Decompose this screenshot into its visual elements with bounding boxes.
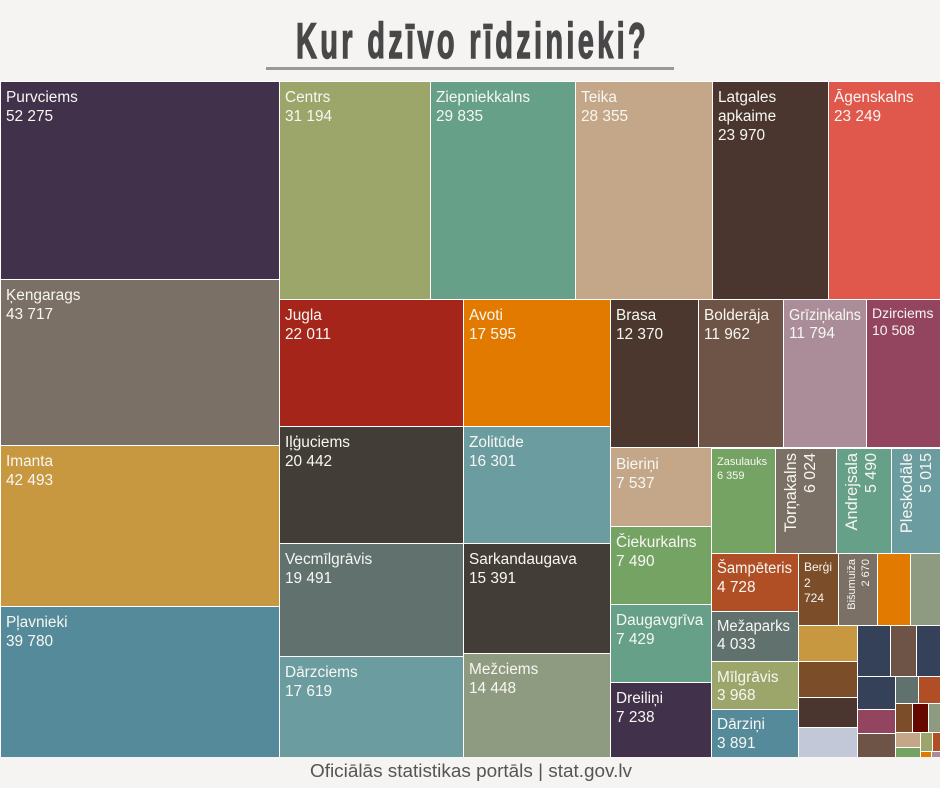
- tile: Latgales apkaime: apkaime: [718, 108, 776, 125]
- tile: Mežciems: [464, 654, 610, 757]
- tile: Pļavnieki: Pļavnieki: [6, 614, 68, 631]
- tile: Avoti: [464, 300, 610, 426]
- tile: Berģi: 2: [804, 576, 811, 590]
- tile: Mežciems: Mežciems: [469, 661, 539, 678]
- tile: Andrejsala: Andrejsala: [843, 452, 861, 530]
- tile: Āgenskalns: Āgenskalns: [834, 89, 914, 106]
- tile: Vecmīlgrāvis: 19 491: [285, 570, 332, 587]
- tile: Āgenskalns: [829, 82, 940, 299]
- tile: Bišumuiža: 2 670: [860, 559, 872, 587]
- tile: Avoti: 17 595: [469, 326, 516, 343]
- tile: Jugla: Jugla: [285, 307, 322, 324]
- tile: Latgales apkaime: [713, 82, 828, 299]
- tile: Mežaparks: 4 033: [717, 636, 756, 653]
- tile: Bišumuiža: [839, 554, 877, 625]
- tile: Mīlgrāvis: Mīlgrāvis: [717, 669, 779, 686]
- tile: Dārzciems: [280, 657, 463, 757]
- tile: Grīziņkalns: Grīziņkalns: [789, 307, 861, 324]
- tile: Bolderāja: [699, 300, 783, 447]
- tile: Pleskodāle: [892, 449, 940, 553]
- tile: Daugavgrīva: 7 429: [616, 631, 655, 648]
- tile: Dārzciems: 17 619: [285, 683, 332, 700]
- tile: Bieriņi: Bieriņi: [616, 456, 659, 473]
- tile: Brasa: [611, 300, 698, 447]
- tile: Mīlgrāvis: [712, 662, 798, 709]
- tile: Torņakalns: [776, 449, 836, 553]
- tile: Vecmīlgrāvis: [280, 544, 463, 656]
- tile: Vecmīlgrāvis: Vecmīlgrāvis: [285, 551, 373, 568]
- tile: Imanta: 42 493: [6, 472, 53, 489]
- tile: Sarkandaugava: 15 391: [469, 570, 516, 587]
- tile: Grīziņkalns: [784, 300, 866, 447]
- tile: Purvciems: [1, 82, 279, 279]
- tile: Berģi: Berģi: [804, 560, 832, 574]
- tile: Centrs: [280, 82, 430, 299]
- tile: Bolderāja: Bolderāja: [704, 307, 769, 324]
- tile: Zolitūde: [464, 427, 610, 543]
- tile: Dārziņi: [712, 710, 798, 757]
- tile: Berģi: [799, 554, 838, 625]
- tile: Bišumuiža: Bišumuiža: [846, 558, 858, 610]
- tile: Pleskodāle: Pleskodāle: [898, 453, 916, 533]
- tile: Avoti: Avoti: [469, 307, 503, 324]
- tile: Šampēteris: [712, 554, 798, 611]
- tile: Zolitūde: 16 301: [469, 453, 516, 470]
- tile: Purvciems: Purvciems: [6, 89, 78, 106]
- tile: Iļģuciems: 20 442: [285, 453, 332, 470]
- tile: Centrs: 31 194: [285, 108, 333, 125]
- tile: Dzirciems: [867, 300, 940, 447]
- tile: Šampēteris: 4 728: [717, 579, 756, 596]
- tile: Āgenskalns: 23 249: [834, 108, 881, 125]
- tile: Purvciems: 52 275: [6, 108, 53, 125]
- tile: Sarkandaugava: [464, 544, 610, 653]
- tile: Teika: 28 355: [581, 108, 628, 125]
- tile: Dzirciems: 10 508: [872, 322, 915, 338]
- tile: Bieriņi: 7 537: [616, 475, 655, 492]
- tile: Imanta: [1, 446, 279, 606]
- tile: Brasa: Brasa: [616, 307, 657, 324]
- tile: Pleskodāle: 5 015: [918, 453, 935, 493]
- tile: Zasulauks: Zasulauks: [717, 456, 768, 468]
- tile: Zasulauks: 6 359: [717, 470, 745, 482]
- tile: Centrs: Centrs: [285, 89, 331, 106]
- footer source: Oficiālās statistikas portāls | stat.gov.lv: [310, 761, 632, 781]
- tile: Mežaparks: [712, 612, 798, 661]
- tile: Ziepniekkalns: 29 835: [436, 108, 483, 125]
- small unlabelled tiles: [799, 554, 940, 757]
- tile: Ķengarags: [1, 280, 279, 445]
- tile: Dārzciems: Dārzciems: [285, 664, 358, 681]
- tile: Ziepniekkalns: [431, 82, 575, 299]
- tile: Jugla: [280, 300, 463, 426]
- tile: Teika: Teika: [581, 89, 617, 106]
- tile: Berģi: 724: [804, 591, 824, 605]
- tile: Dreiliņi: [611, 683, 711, 757]
- tile: Torņakalns: Torņakalns: [782, 453, 800, 532]
- tile: Zolitūde: Zolitūde: [469, 434, 524, 451]
- tile: Ķengarags: 43 717: [6, 306, 53, 323]
- tile: Dreiliņi: Dreiliņi: [616, 690, 663, 707]
- tile: Daugavgrīva: Daugavgrīva: [616, 612, 704, 629]
- tile: Grīziņkalns: 11 794: [789, 325, 835, 342]
- tile: Mīlgrāvis: 3 968: [717, 687, 756, 704]
- tile: Čiekurkalns: 7 490: [616, 553, 655, 570]
- tile: Jugla: 22 011: [285, 326, 331, 343]
- tile: Pļavnieki: [1, 607, 279, 757]
- tile: Torņakalns: 6 024: [802, 453, 819, 493]
- tile: Mežaparks: Mežaparks: [717, 618, 790, 635]
- tile: Sarkandaugava: Sarkandaugava: [469, 551, 577, 568]
- tile: Čiekurkalns: Čiekurkalns: [616, 534, 697, 551]
- tile: Teika: [576, 82, 712, 299]
- tile: Latgales apkaime: 23 970: [718, 127, 765, 144]
- tile: Imanta: Imanta: [6, 453, 53, 470]
- tile: Pļavnieki: 39 780: [6, 633, 53, 650]
- tile: Ziepniekkalns: Ziepniekkalns: [436, 89, 530, 106]
- tile: Šampēteris: Šampēteris: [717, 560, 792, 577]
- tile: Bolderāja: 11 962: [704, 326, 750, 343]
- tile: Andrejsala: [837, 449, 891, 553]
- tile: Dzirciems: Dzirciems: [872, 305, 933, 321]
- tile: Bieriņi: [611, 448, 711, 526]
- tile: Čiekurkalns: [611, 527, 711, 604]
- tile: Dreiliņi: 7 238: [616, 709, 655, 726]
- tile: Andrejsala: 5 490: [863, 453, 880, 493]
- tile: Daugavgrīva: [611, 605, 711, 682]
- tile: Ķengarags: Ķengarags: [6, 287, 81, 304]
- tile: Iļģuciems: Iļģuciems: [285, 434, 350, 451]
- tile: Latgales apkaime: Latgales: [718, 89, 776, 106]
- tile: Dārziņi: Dārziņi: [717, 716, 765, 733]
- title: Kur dzīvo rīdzinieki?: [296, 13, 646, 69]
- tile: Iļģuciems: [280, 427, 463, 543]
- tile: Zasulauks: [712, 449, 775, 553]
- tile: Dārziņi: 3 891: [717, 735, 756, 752]
- tile: Brasa: 12 370: [616, 326, 663, 343]
- tile: Mežciems: 14 448: [469, 680, 516, 697]
